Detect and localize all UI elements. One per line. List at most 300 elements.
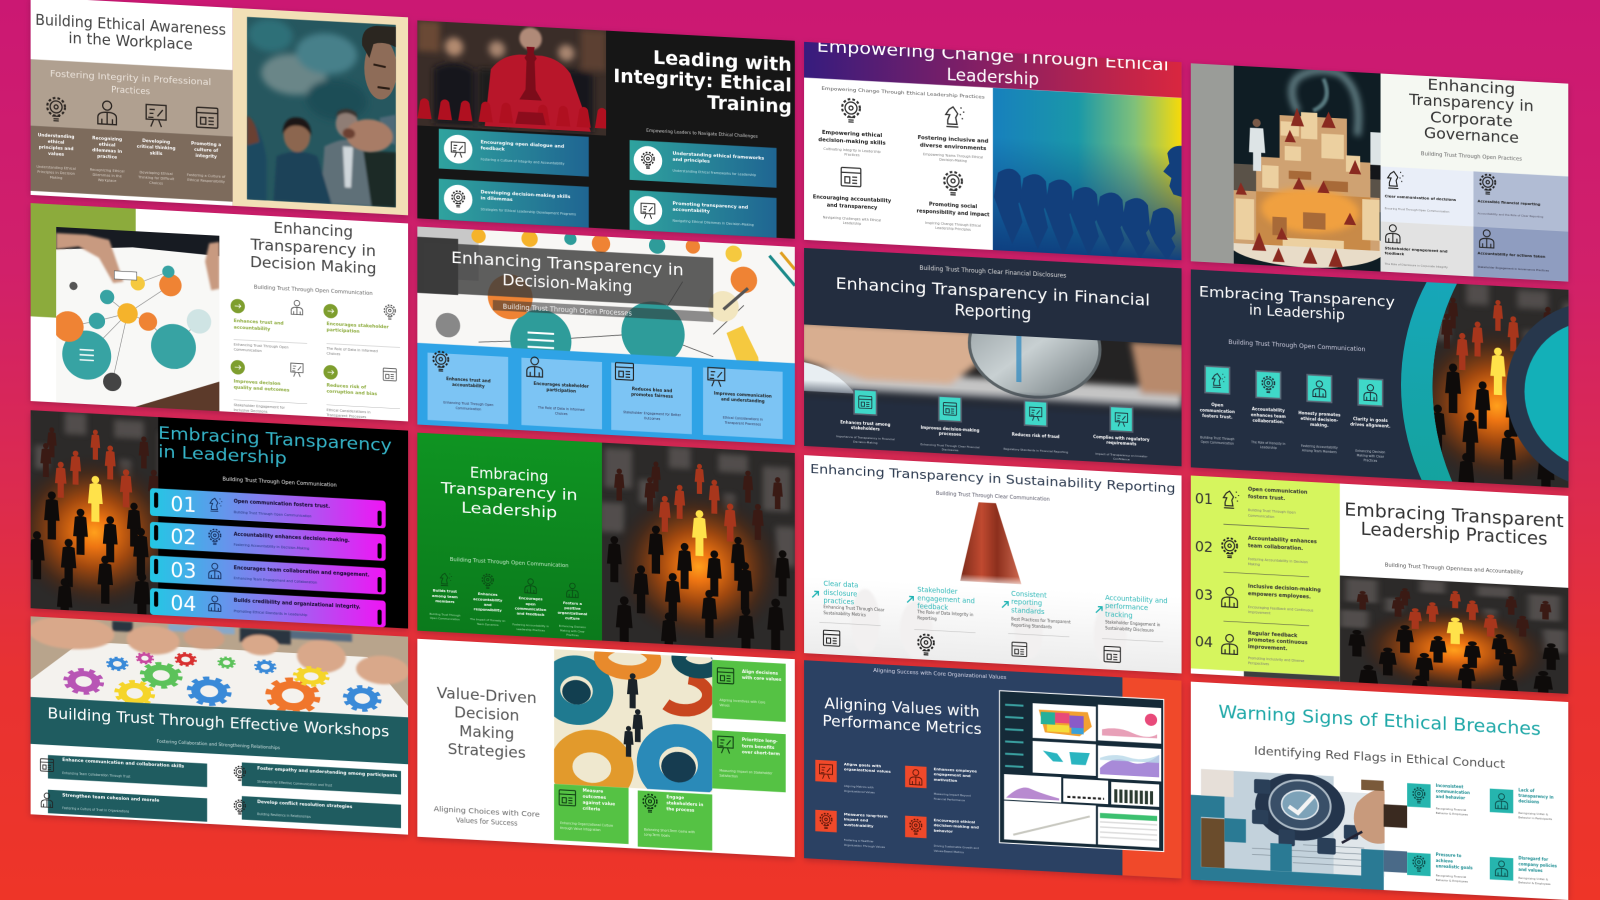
title: Leading with [653,48,792,76]
metric: ethical behaviour: behavior [934,827,953,834]
card: transparency: Navigating Ethical Dilemmas in Decision-Making [672,219,754,227]
benefit labels: Reduces risk of fraud [1012,432,1060,439]
column descriptions: Making [50,176,63,180]
benefit labels: fosters trust. [1202,413,1233,420]
title [158,423,392,474]
item: trust and accountability: accountability [234,324,270,332]
column labels: critical thinking [137,144,176,152]
metric: ethical behaviour: Driving Sustainable Growth and [934,844,979,850]
icon tiles [854,389,1133,432]
band of cards: Reduces bias and [632,386,672,393]
card: ethical frameworks: Understanding ethical frameworks [672,152,764,162]
item: accountability: and transparency [827,202,878,211]
band of cards: promotes fairness [631,392,673,399]
benefit descriptions [836,434,1148,462]
image: gear and pen on documents [1191,767,1407,891]
card: long-term benefits: over short-term [742,749,780,757]
column labels: dilemmas in [92,147,122,155]
cell: accountability: Stakeholder Engagement in Governance Practices [1478,265,1549,272]
card: ethical frameworks: Understanding Ethical Frameworks for Leadership [672,169,756,177]
title: Governance [1424,124,1519,147]
title: Empowering Change Through Ethical [817,36,1169,75]
benefit descriptions: The Impact of Honesty on [470,617,506,623]
title [818,42,1168,88]
band of cards: Communication [456,406,481,412]
bar 01: Open communication fosters trust. [234,499,330,510]
metric: engagement: Financial Performance [934,797,965,803]
item: social responsibility: responsibility and impact [917,208,990,218]
bar 03: Enhancing Team Engagement and Collaboration [234,576,317,585]
warning: disregard for policies: Recognizing Unfair & [1518,876,1548,882]
column descriptions: Recognizing Ethical [90,168,124,173]
item: decision quality: Inclusive Decisions [234,408,268,414]
benefit descriptions: Making with Clear [560,628,586,634]
title: Aligning Values with [824,695,980,721]
warning: inconsistent communication: Inconsistent [1436,783,1463,789]
title: Strategies [448,740,526,762]
icon tiles [1205,366,1383,406]
title: Embracing Transparency [158,423,392,455]
panel: Value-Driven Decision Making Strategies [417,632,795,857]
item 03: empowers employees. [1248,591,1311,600]
warning: unrealistic goals: Behavior & Employees [1436,878,1468,884]
image: bubbles and pencils [417,224,795,385]
title box: Building Trust Through Open Processes [503,303,632,318]
item: stakeholder engagement: engagement and [917,594,975,605]
bar 04 [150,588,386,627]
title [822,695,982,738]
metric: goals: organizational values [844,767,892,774]
item: reduces corruption: Transparent Processes [326,413,366,419]
panel: Enhancing Transparency in Corporate Governance [1191,63,1568,283]
item: trust and accountability: Enhancing Trust Through Open [234,343,289,350]
title [440,462,578,523]
benefit descriptions: Enhancing Decision [1355,449,1385,454]
band of cards: accountability [452,382,485,389]
benefit descriptions: Making with Clear [1357,453,1385,459]
benefit labels: requirements [1106,440,1137,447]
benefit descriptions: Fostering Accountability [1301,444,1338,450]
panel: Embracing Transparent Leadership Practices [1191,476,1568,711]
warning: disregard for policies: Disregard for [1518,856,1548,862]
benefit descriptions: Importance of Transparency in Financial [836,434,895,442]
warning: lack of transparency: Recognizing Unfair & [1518,811,1548,816]
workshop goal: conflict resolution [234,796,401,828]
card: measure outcomes: outcomes [583,794,606,801]
panel: Empowering Change Through Ethical Leadership [804,35,1182,261]
subtitle: Aligning Success with Core Organizational Values [873,668,1007,681]
band of cards [417,343,795,446]
metric: goals [815,760,892,796]
band of cards: Encourages stakeholder [534,381,589,389]
item: reduces corruption [323,365,400,421]
ring and crowd image [1395,150,1600,647]
title: Enhancing [273,219,353,241]
benefit labels [840,419,1150,447]
title: Building Ethical Awareness [35,12,226,39]
panel: Building Trust Through Effective Workshops [29,614,409,835]
item: data disclosure: Enhancing Trust Through Clear [823,604,884,612]
item: accountability tracking: Accountability and [1105,594,1168,605]
item: inclusive environments: diverse environments [920,143,986,152]
bar 04: 04 [170,591,196,616]
image: bubble diagram on paper [53,227,219,412]
card: align decisions: Aligning Incentives with Core [719,698,765,704]
item 01: Open communication [1248,487,1308,496]
benefit descriptions: Practices [566,633,579,637]
item: trust and accountability: Communication [234,348,262,353]
benefit labels: Encourages [519,596,543,602]
bar 01: Building Trust Through Open Communication [234,510,312,518]
card: long-term benefits: Prioritize long- [742,738,778,745]
item: accountability tracking [1096,593,1168,665]
benefit descriptions: Decision-Making [853,439,878,445]
card: long-term benefits: Satisfaction [719,774,738,779]
item 04: Perspectives [1248,661,1269,666]
bar 04: Promoting Ethical Standards in Leadership [234,609,308,617]
bar 03: 03 [170,558,196,583]
benefit descriptions: Open Communication [430,616,460,622]
item: accountability: Encouraging accountability [813,194,891,205]
card: long-term benefits: Measuring Impact on Stakeholder [719,768,773,775]
item 04: improvement. [1248,644,1288,652]
subtitle: Fostering Integrity in Professional [50,70,211,88]
card: decision-making skills: Developing decision-making skills [481,190,570,200]
title [36,14,226,51]
card: engage stakeholders: Engage [666,795,684,801]
metric: engagement: motivation [934,776,958,783]
workshop goal: empathy: Strategies for Effective Communication and Trust [257,780,333,788]
benefit descriptions: Team Dynamics [476,622,499,627]
panel: Leading with Integrity [417,20,795,239]
column labels: ethical [99,142,116,148]
warning: inconsistent communication: Behavior & Employees [1436,811,1468,816]
item: consistent reporting: standards [1011,606,1045,616]
card: open dialogue: Fostering a Culture of Integrity and Accountability [481,158,565,166]
column descriptions: Developing Ethical [139,170,173,176]
benefit labels: Builds trust [433,589,457,594]
card: decision-making skills: in dilemmas [481,195,513,203]
item: inclusive environments: Decision-Making [939,158,967,163]
title box [423,242,713,322]
card: transparency: Promoting transparency and [672,202,748,211]
benefit descriptions: Practices [1364,458,1378,463]
title: Enhancing Transparency in Financial [836,273,1150,309]
benefit descriptions [429,612,586,638]
card: open dialogue: feedback [481,145,506,153]
card: long-term benefits [712,730,786,792]
card: engage stakeholders: Long-Term Goals [644,833,670,838]
card: align decisions [712,660,786,722]
item: ethical decision-making skills: decision-making skills [818,137,886,147]
card: decision-making skills [439,179,589,228]
title: Transparency in [440,479,578,504]
benefit labels: Fosters a [563,601,582,606]
title: Embracing Transparent [1344,500,1564,532]
item: consistent reporting: Consistent [1011,590,1047,600]
warning: lack of transparency [1490,786,1554,821]
benefit labels: positive [564,606,581,611]
title: Integrity: Ethical [613,66,792,97]
card: measure outcomes: Measure [583,789,603,795]
item: social responsibility: Promoting social [929,202,977,210]
item: stakeholder engagement [907,585,976,657]
band of cards: Enhancing Trust Through Open [443,400,493,407]
column labels: Developing [142,139,170,145]
cell: clear communication: Clear communication of decisions [1385,194,1457,202]
image: crowd [599,442,797,667]
cell: clear communication: Ensuring Trust Through Open Communication [1385,206,1450,214]
title: in Leadership [1249,302,1345,324]
subtitle: Empowering Change Through Ethical Leadership Practices [821,86,985,101]
metric: engagement: Enhances employee [934,766,977,774]
item 03: Encouraging Feedback and Continuous [1248,605,1313,613]
title: Transparency in [249,236,376,260]
band of cards: Transparent Processes [724,421,761,427]
panel: Embracing Transparency in Leadership, ring design [1191,139,1600,647]
title: Embracing Transparency [1199,284,1395,311]
item 01 [1195,484,1309,529]
workshop goal: cohesion: Strengthen team cohesion and morale [62,793,159,804]
title [1199,284,1395,326]
benefit descriptions: The Role of Honesty in [1251,440,1286,446]
image: silhouettes on colour gradient [993,88,1182,261]
benefit descriptions: Leadership Practices [516,627,545,632]
benefit labels: members [435,599,454,604]
image: chess king and red suit [417,20,609,136]
title: Decision Making [250,253,377,278]
cell: stakeholder engagement: Stakeholder engagement and [1385,246,1448,254]
title: Embracing [470,463,548,486]
subtitle: Identifying Red Flags in Ethical Conduct [1254,744,1506,771]
band of cards: Choices [555,412,568,416]
bar 02: Accountability enhances decision-making. [234,531,350,544]
item: data disclosure: Clear data [823,580,858,590]
item: stakeholder engagement: feedback [917,602,948,612]
column labels: principles and [39,144,74,152]
benefit labels: Clarity in goals [1353,416,1388,423]
panel: Warning Signs of Ethical Breaches [1191,682,1568,900]
card: measure outcomes [554,784,629,844]
item: stakeholder participation: participation [327,327,360,335]
benefit descriptions: Impact of Transparency on Investor [1095,452,1148,458]
warning: disregard for policies: company policies [1518,861,1558,868]
title band: Building Trust Through Effective Workshops [47,704,389,741]
icon row [47,98,218,130]
metric: goals: Aligning Metrics with [844,784,874,789]
workshop goal: empathy: Foster empathy and understanding among participants [257,765,398,779]
benefit labels: Complies with regulatory [1093,434,1150,442]
item: ethical decision-making skills: Cultivating Integrity in Leadership [823,147,881,154]
warning: unrealistic goals: Pressure to [1436,852,1461,858]
item: accountability tracking: performance [1105,602,1148,612]
cell: accessible reporting [1473,171,1568,232]
title [1344,500,1564,551]
column labels: practice [97,154,117,161]
item 04: promotes continuous [1248,637,1308,647]
benefit labels: culture [565,616,580,621]
cell: stakeholder engagement [1381,221,1473,276]
tile glyphs [859,396,1128,427]
title: Enhancing Transparency in Sustainability Reporting [810,462,1176,496]
metric: ethical behaviour: Encourages ethical [934,817,975,825]
title: in Leadership [158,441,287,468]
workshop goal: cohesion [41,789,207,822]
band of cards: and understanding [721,397,765,404]
title: Reporting [954,300,1031,323]
card: engage stakeholders [638,790,712,851]
column descriptions: Understanding Ethical [36,165,76,171]
cell: stakeholder engagement: feedback [1385,251,1405,256]
metric: engagement: engagement and [934,771,971,778]
warning: disregard for policies: and values [1518,867,1543,873]
subtitle: Building Trust Through Open Communication [254,285,373,297]
subtitle [50,70,210,94]
benefit labels: Enhances [478,592,498,597]
cell: clear communication [1381,166,1473,226]
subtitle: Building Trust Through Open Practices [1421,151,1522,163]
panel: Enhancing Transparency in Sustainability Reporting [804,455,1182,673]
column descriptions: Choices [149,181,163,186]
item: data disclosure [812,579,885,649]
bar 02 [150,522,386,561]
benefit labels: organizational [558,611,587,616]
title: Leadership Practices [1361,520,1547,550]
metric: ethical behaviour [905,816,979,855]
metric: long-term impact: sustainability [844,822,874,828]
warning: disregard for policies: Behavior & Employees [1518,880,1551,886]
benefit labels: Enhances trust among [840,419,890,427]
item: inclusive environments: Fostering inclusive and [918,135,988,145]
item 02: Making [1248,562,1260,567]
subtitle: Building Trust Through Open Communication [450,557,569,569]
card: transparency: accountability [672,207,710,215]
item 04 [1195,628,1308,669]
benefit descriptions: Confidence [1113,457,1130,461]
column descriptions: Ethical Responsibility [187,178,225,184]
title: Decision [454,703,519,725]
metric: ethical behaviour: Values-Based Metrics [934,849,964,855]
item 01: Building Trust Through Open [1248,508,1296,515]
image: giant coloured rings [550,639,719,801]
item: stakeholder engagement: The Role of Data Integrity in [917,609,973,617]
warning: inconsistent communication: and behavior [1436,794,1465,800]
warning: disregard for policies [1490,854,1558,887]
metric: goals: Organizational Values [844,789,875,795]
subtitle: Building Trust Through Open Communication [222,477,337,489]
benefit labels: open [526,602,536,606]
warning: lack of transparency: Lack of [1518,787,1534,793]
card: align decisions: with core values [742,675,782,683]
band of cards: Ethical Considerations in [723,416,763,422]
subtitle: Building Trust Through Clear Communication [936,491,1050,503]
title: Corporate [1430,108,1513,131]
title: Warning Signs of Ethical Breaches [1218,702,1541,740]
benefit labels: drives alignment. [1350,421,1391,429]
item 04: 04 [1195,634,1213,651]
warning: inconsistent communication [1407,781,1470,817]
card: ethical frameworks: and principles [672,157,710,165]
warning: lack of transparency: decisions [1518,798,1540,805]
title: Value-Driven [437,684,537,707]
benefit labels: Improves decision-making [921,425,979,433]
item: accountability: Navigating Challenges with Ethical [823,215,881,223]
metric: engagement [905,765,977,803]
item 03: 03 [1195,587,1213,604]
benefit labels: accountability [473,597,503,603]
column labels: Promoting a [191,141,221,148]
item: decision quality: Improves decision [234,379,281,387]
benefit labels: enhances team [1251,412,1286,419]
image: crowd around glowing figure [0,408,193,633]
item: stakeholder engagement: Stakeholder [917,586,958,596]
subtitle: Aligning Choices with Core [434,805,540,819]
warning: inconsistent communication: Recognizing Financial [1436,806,1466,812]
item: inclusive environments: Empowering Teams Through Ethical [923,152,983,160]
image: magnifying glass and hands [799,282,1187,422]
title band [31,697,408,764]
image: analytics dashboard [999,690,1164,852]
tile glyphs [1212,373,1377,401]
item: trust and accountability: Enhances trust and [234,319,284,327]
benefit labels: Honesty promotes [1298,410,1340,417]
item: accountability tracking: tracking [1105,610,1133,620]
item 03 [1195,581,1321,626]
card: align decisions: Align decisions [742,670,778,677]
subtitle: Practices [111,85,151,97]
band of cards: Improves communication [714,391,772,399]
column labels: Recognizing [92,136,122,143]
card: open dialogue [439,129,589,177]
benefit labels: communication [1200,407,1235,414]
benefit labels: and feedback [517,612,545,617]
benefit labels: responsibility [474,607,502,613]
column labels: culture of [194,147,218,154]
item: accountability: Leadership [843,221,861,226]
item: consistent reporting [1002,589,1071,659]
cell: stakeholder engagement: The Role of Disclosure in Corporate Integrity [1384,261,1448,269]
item: consistent reporting: reporting [1011,598,1042,608]
subtitle: Building Trust Through Openness and Accountability [1385,563,1523,576]
panel: Building Ethical Awareness in the Workplace [31,0,408,215]
warning: unrealistic goals [1407,851,1473,884]
title [437,684,537,762]
item 01: fosters trust. [1248,494,1285,502]
item 02: 02 [1195,539,1213,556]
metric: ethical behaviour: decision-making and [934,822,979,830]
item 02: Accountability enhances [1248,536,1317,546]
card: long-term benefits: term benefits [742,743,775,751]
workshop goal: conflict resolution: Building Resilience in Relationships [257,812,311,819]
benefit descriptions: Leadership [1260,445,1277,450]
metric: long-term impact: Fostering a Healthier [844,838,874,844]
item: stakeholder participation: Choices [327,352,341,357]
benefit labels: collaboration. [1252,418,1285,424]
metric: long-term impact: Organization Through Values [844,843,885,849]
benefit labels [1200,402,1391,431]
title [1409,78,1533,143]
panel: Aligning Values with Performance Metrics [804,660,1182,879]
column labels: integrity [195,153,217,160]
column descriptions: Fostering a Culture of [187,173,225,179]
subtitle: Building Trust Through Open Communication [1228,339,1366,353]
cell: accessible reporting: Accountability and the Role of Clear Reporting [1478,211,1543,219]
item: social responsibility: Inspiring Change Through Ethical [925,221,981,228]
warning: inconsistent communication: communication [1436,788,1470,795]
benefit labels: stakeholders [851,425,880,432]
column descriptions: Dilemmas in the [93,173,122,178]
bar 02: 02 [170,524,196,550]
